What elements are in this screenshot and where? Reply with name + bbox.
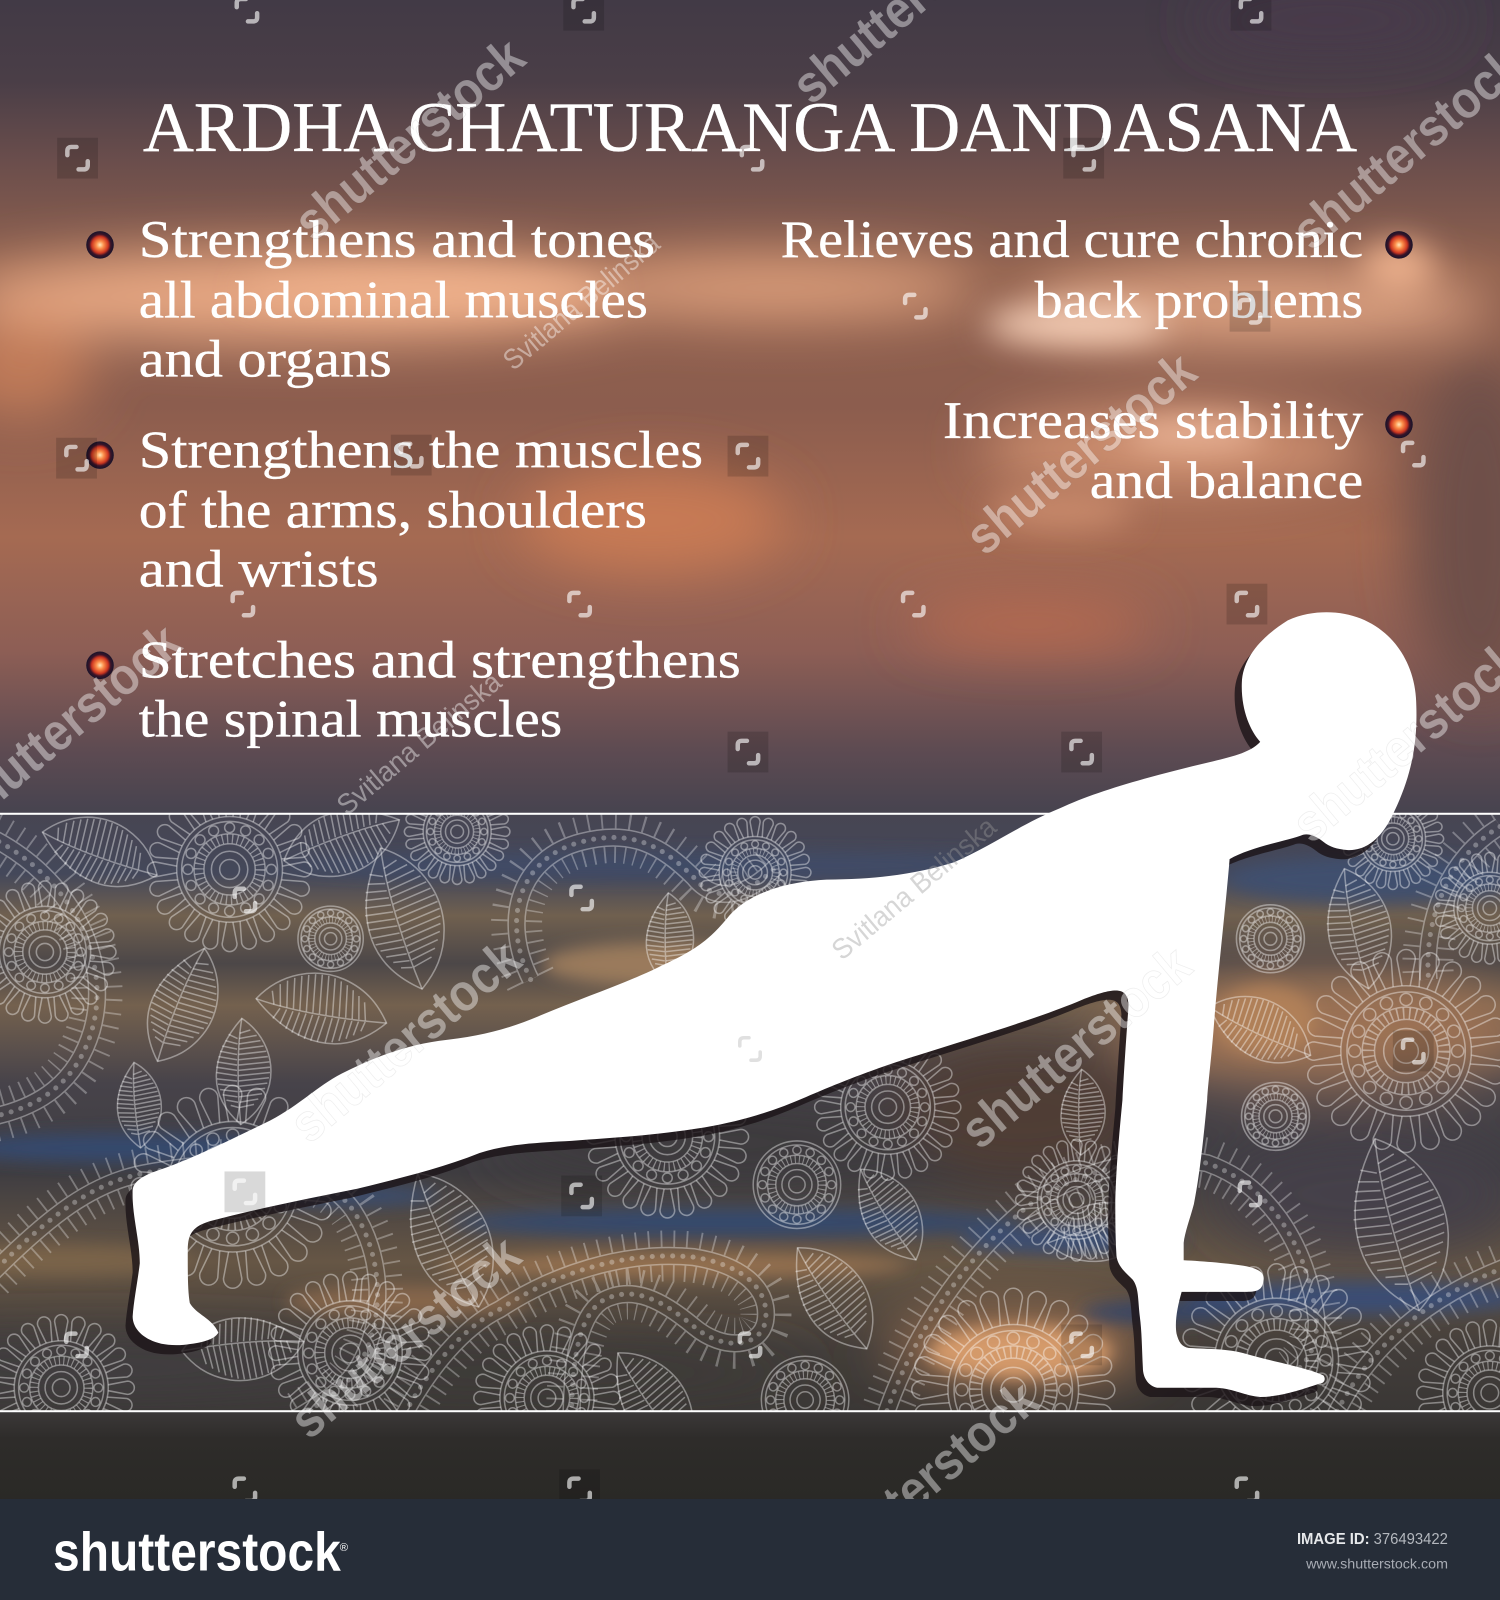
benefit: arms and shoulders: and wrists bbox=[139, 541, 379, 599]
title: ARDHA CHATURANGA DANDASANA bbox=[143, 88, 1358, 167]
shutterstock watermarks: shutterstock bbox=[949, 934, 1203, 1160]
background: sunset sky bbox=[0, 0, 1500, 814]
shutterstock watermarks: shutterstock bbox=[796, 1369, 1050, 1595]
footer registered mark: ® bbox=[340, 1542, 349, 1554]
benefits list: left column bbox=[139, 211, 741, 749]
footer image id: IMAGE ID: 376493422 bbox=[1297, 1531, 1448, 1548]
benefit: arms and shoulders bbox=[139, 421, 703, 599]
shutterstock watermarks: Svitlana Belinska bbox=[826, 811, 1003, 967]
bullet dots bbox=[86, 231, 1413, 679]
faint mark on silhouette bbox=[740, 1038, 760, 1060]
band divider lines bbox=[0, 813, 1500, 1412]
footer site url: www.shutterstock.com bbox=[1305, 1556, 1448, 1572]
ornamental mandala and paisley pattern bbox=[0, 779, 1500, 1491]
benefit: arms and shoulders: Strengthens the muscles bbox=[139, 421, 703, 479]
shutterstock watermarks: shutterstock bbox=[279, 1224, 532, 1450]
benefit: abdominal muscles bbox=[139, 211, 655, 389]
benefit: back problems: back problems bbox=[1035, 271, 1363, 329]
shutterstock watermarks: shutterstock bbox=[279, 928, 532, 1154]
shutterstock watermarks: Svitlana Belinska bbox=[331, 666, 508, 822]
benefit: stability and balance: Increases stability bbox=[943, 392, 1364, 450]
benefit: spinal muscles: the spinal muscles bbox=[139, 691, 562, 749]
benefit: spinal muscles bbox=[139, 632, 741, 749]
dark floor band bbox=[0, 1412, 1500, 1500]
benefit: abdominal muscles: all abdominal muscles bbox=[139, 271, 648, 329]
footer bar bbox=[0, 1499, 1500, 1600]
benefit: abdominal muscles: and organs bbox=[139, 331, 392, 389]
paisley bands bbox=[0, 806, 1500, 1429]
benefit: back problems: Relieves and cure chronic bbox=[781, 211, 1363, 269]
benefit: stability and balance bbox=[943, 392, 1364, 510]
benefit: abdominal muscles: Strengthens and tones bbox=[139, 211, 655, 269]
benefits list: right column bbox=[781, 211, 1364, 510]
shutterstock watermarks: shutterstock bbox=[283, 26, 536, 252]
silhouette: yoga plank pose bbox=[133, 612, 1416, 1397]
shutterstock watermarks: shutterstock bbox=[954, 340, 1208, 566]
silhouette shadow bbox=[125, 621, 1409, 1406]
shutterstock watermarks: Svitlana Belinska bbox=[497, 228, 666, 377]
benefit: back problems bbox=[781, 211, 1363, 329]
benefit: spinal muscles: Stretches and strengthens bbox=[139, 632, 741, 690]
footer logo: shutterstock bbox=[53, 1520, 341, 1582]
patterned band bbox=[0, 814, 1500, 1410]
benefit: stability and balance: and balance bbox=[1090, 452, 1363, 510]
benefit: arms and shoulders: of the arms, shoulders bbox=[139, 482, 647, 540]
